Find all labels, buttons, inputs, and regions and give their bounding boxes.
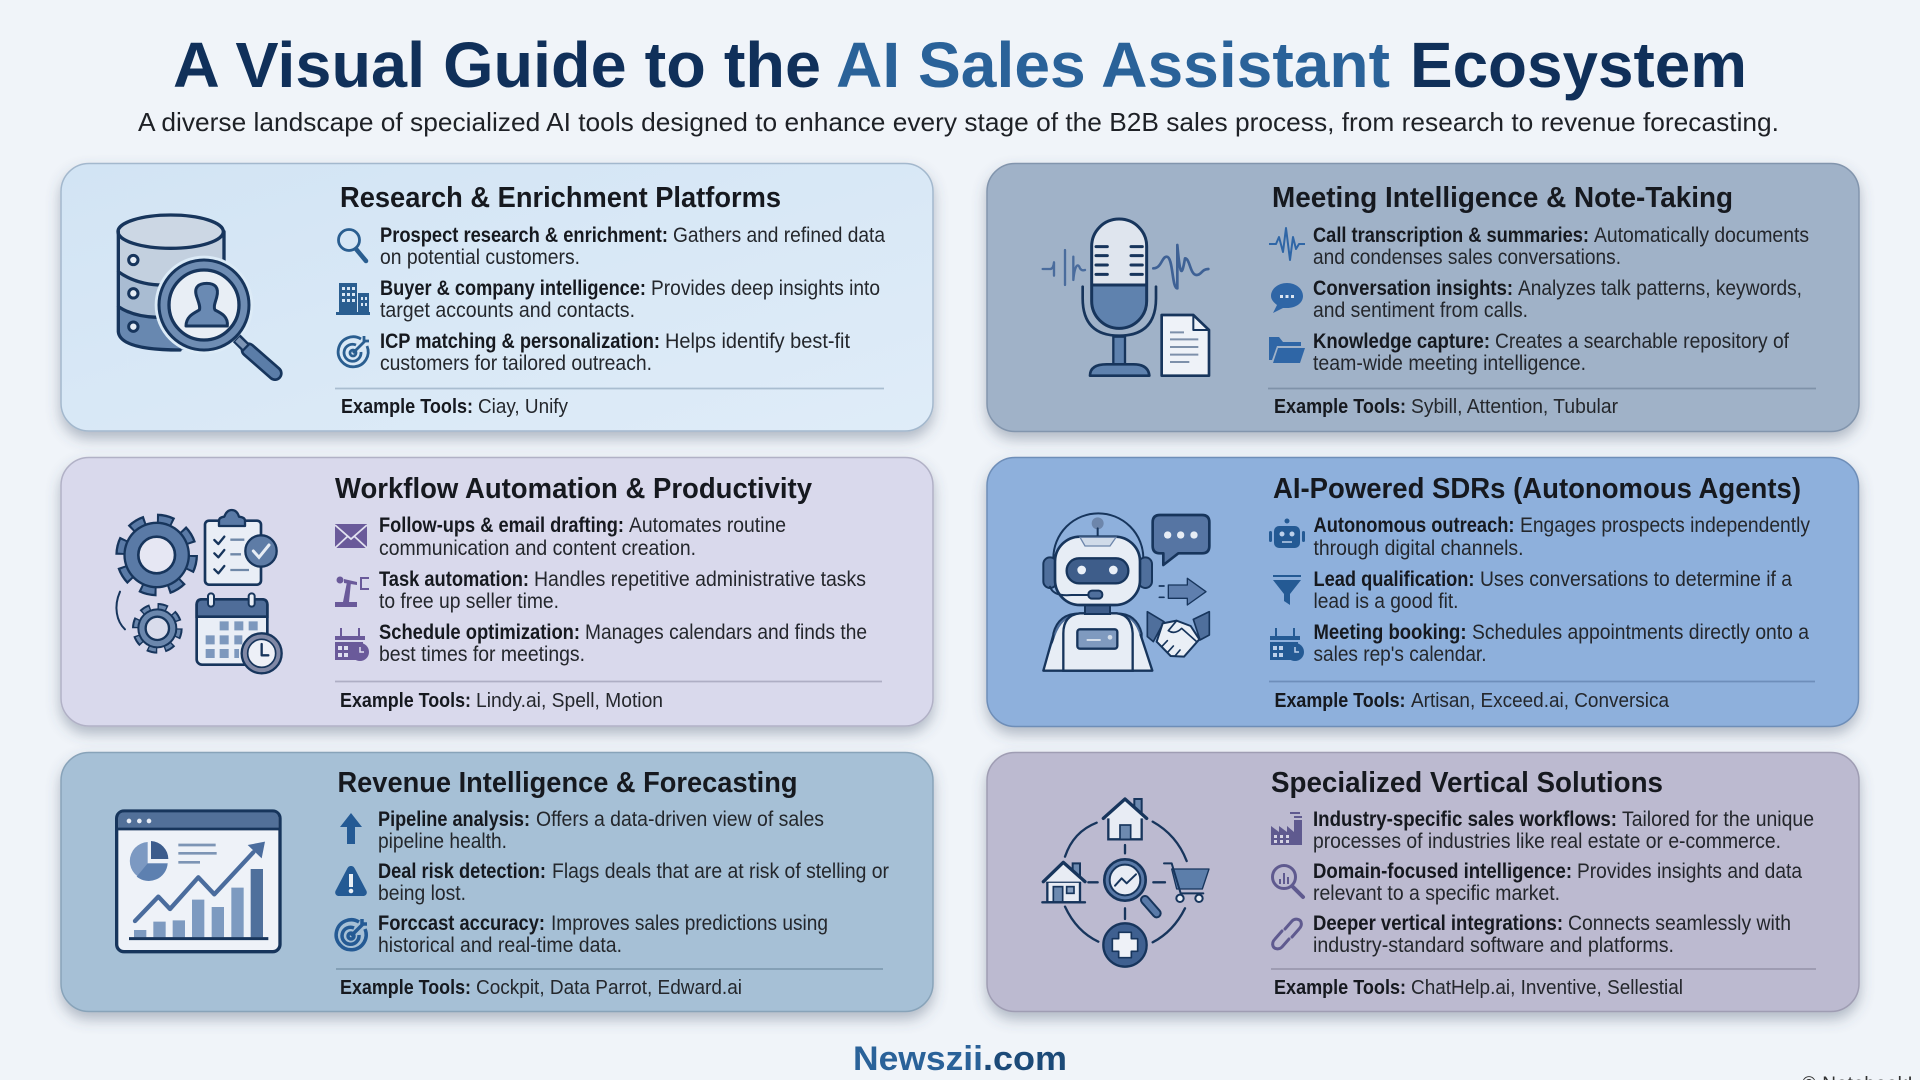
example tools: Example Tools: xyxy=(340,977,471,999)
bullet: meeting booking: sales rep's calendar. xyxy=(1314,643,1486,666)
bullet: buyer intelligence: target accounts and contacts. xyxy=(380,299,635,322)
heading: Specialized Vertical Solutions xyxy=(1271,767,1663,799)
bullet: conversation insights: Conversation insights: xyxy=(1313,277,1513,300)
icon: factory xyxy=(1271,813,1302,845)
bullet: ICP matching: Helps identify best-fit xyxy=(665,330,850,353)
title: Ecosystem xyxy=(1410,29,1747,101)
bullet: conversation insights: Analyzes talk patterns, keywords, xyxy=(1518,277,1802,300)
bullet: follow-ups: communication and content creation. xyxy=(379,537,696,560)
bullet: schedule optimization xyxy=(335,621,867,666)
bullet: knowledge capture: team-wide meeting intelligence. xyxy=(1313,352,1586,375)
bullet: ICP matching: ICP matching & personalization: xyxy=(380,330,660,353)
bullet: meeting booking: Schedules appointments directly onto a xyxy=(1472,621,1809,644)
panel: AI-Powered SDRs xyxy=(987,458,1858,726)
icon: gears, checklist and calendar xyxy=(116,510,282,673)
heading: Meeting Intelligence & Note-Taking xyxy=(1272,182,1733,214)
bullet: task automation: to free up seller time. xyxy=(379,590,559,613)
bullet: knowledge capture xyxy=(1269,330,1789,375)
bullet: prospect research: Gathers and refined data xyxy=(673,224,885,247)
bullet: lead qualification: Lead qualification: xyxy=(1314,568,1474,591)
bullet: lead qualification: lead is a good fit. xyxy=(1314,590,1458,613)
bullet: autonomous outreach: Autonomous outreach: xyxy=(1314,514,1514,537)
heading: AI-Powered SDRs (Autonomous Agents) xyxy=(1273,473,1801,505)
bullet: deal risk: being lost. xyxy=(378,882,466,905)
footer brand: Newszii xyxy=(853,1040,983,1078)
icon: robot with speech bubble and handshake xyxy=(1043,513,1209,671)
bullet: call transcription: Automatically documents xyxy=(1594,224,1809,247)
bullet: prospect research: Prospect research & enrichment: xyxy=(380,224,668,247)
icon: folder xyxy=(1269,337,1305,363)
icon: warning triangle xyxy=(335,866,367,896)
bullet: call transcription: Call transcription & summaries: xyxy=(1313,224,1589,247)
bullet: conversation insights xyxy=(1271,277,1802,322)
bullet: forecast accuracy: Improves sales predictions using xyxy=(551,912,828,935)
icon: calendar with clock xyxy=(335,628,369,661)
bullet: lead qualification xyxy=(1273,568,1792,613)
heading: Workflow Automation & Productivity xyxy=(335,473,812,505)
bullet: knowledge capture: Knowledge capture: xyxy=(1313,330,1490,353)
bullet: conversation insights: and sentiment from calls. xyxy=(1313,299,1528,322)
bullet: domain intelligence: Domain-focused intelligence: xyxy=(1313,860,1572,883)
bullet: ICP matching: customers for tailored outreach. xyxy=(380,352,652,375)
bullet: task automation: Task automation: xyxy=(379,568,529,591)
bullet: meeting booking xyxy=(1270,621,1809,666)
panel: Revenue Intelligence & Forecasting xyxy=(61,752,933,1012)
example tools: Example Tools: xyxy=(1274,396,1406,418)
icon: chain link xyxy=(1273,919,1301,949)
icon: industry hub xyxy=(1042,799,1209,967)
bullet: vertical integrations: Deeper vertical integrations: xyxy=(1313,912,1563,935)
subtitle: A diverse landscape of specialized AI tools designed to enhance every stage of the B2B sales process, from research to revenue forecasting. xyxy=(138,107,1779,137)
bullet: forecast accuracy: Forccast accuracy: xyxy=(378,912,545,935)
icon: envelope xyxy=(335,524,367,548)
icon: chat bubble xyxy=(1271,283,1303,313)
icon: target xyxy=(338,336,369,367)
bullet: domain intelligence xyxy=(1272,860,1802,905)
heading: Revenue Intelligence & Forecasting xyxy=(338,767,798,799)
icon: up arrow xyxy=(340,813,362,844)
bullet: industry workflows: Industry-specific sales workflows: xyxy=(1313,808,1617,831)
bullet: prospect research: on potential customers. xyxy=(380,246,580,269)
icon: robot arm xyxy=(335,576,369,607)
example tools: Example Tools: xyxy=(1274,690,1406,712)
panel: Workflow Automation & Productivity xyxy=(61,458,933,726)
bullet: call transcription xyxy=(1269,224,1809,269)
bullet: task automation xyxy=(335,568,866,613)
bullet: buyer intelligence: Buyer & company intelligence: xyxy=(380,277,646,300)
bullet: pipeline analysis: Offers a data-driven view of sales xyxy=(536,808,824,831)
example tools: Cockpit, Data Parrot, Edward.ai xyxy=(476,977,742,999)
bullet: vertical integrations xyxy=(1273,912,1791,957)
bullet: industry workflows: Tailored for the unique xyxy=(1622,808,1814,831)
title: A Visual Guide to the xyxy=(173,29,821,101)
bullet: domain intelligence: Provides insights and data xyxy=(1577,860,1802,883)
bullet: follow-ups: Automates routine xyxy=(629,514,786,537)
example tools: Artisan, Exceed.ai, Conversica xyxy=(1411,690,1670,712)
example tools: Example Tools: xyxy=(341,396,473,418)
bullet: buyer intelligence xyxy=(336,277,880,322)
bullet: vertical integrations: Connects seamlessly with xyxy=(1568,912,1791,935)
panel: Meeting Intelligence & Note-Taking xyxy=(987,164,1859,432)
icon: office building xyxy=(336,283,370,315)
bullet: pipeline analysis: Pipeline analysis: xyxy=(378,808,530,831)
icon: robot head xyxy=(1269,518,1305,548)
bullet: ICP matching xyxy=(338,330,850,375)
bullet: follow-ups: Follow-ups & email drafting: xyxy=(379,514,624,537)
bullet: pipeline analysis: pipeline health. xyxy=(378,830,507,853)
icon: magnifier with bars xyxy=(1272,866,1303,897)
icon: database with magnifier xyxy=(118,215,275,373)
bullet: meeting booking: Meeting booking: xyxy=(1314,621,1466,644)
panel: Specialized Vertical Solutions xyxy=(987,752,1859,1012)
bullet: forecast accuracy xyxy=(336,912,828,957)
bullet: industry workflows xyxy=(1271,808,1814,853)
example tools: Example Tools: xyxy=(1274,977,1406,999)
bullet: deal risk: Flags deals that are at risk of stelling or xyxy=(552,860,889,883)
bullet: industry workflows: processes of industries like real estate or e-commerce. xyxy=(1313,830,1781,853)
icon: waveform xyxy=(1269,228,1305,260)
icon: funnel xyxy=(1273,575,1301,605)
example tools: Example Tools: xyxy=(340,690,471,712)
bullet: deal risk: Deal risk detection: xyxy=(378,860,546,883)
bullet: task automation: Handles repetitive administrative tasks xyxy=(534,568,866,591)
panel: Research & Enrichment Platforms xyxy=(61,164,933,431)
icon: microphone and document xyxy=(1043,219,1209,376)
bullet: follow-ups xyxy=(335,514,786,560)
example tools: Ciay, Unify xyxy=(478,396,568,418)
title: AI Sales Assistant xyxy=(836,29,1390,101)
bullet: forecast accuracy: historical and real-time data. xyxy=(378,934,622,957)
bullet: deal risk xyxy=(335,860,889,905)
bullet: schedule optimization: Manages calendars and finds the xyxy=(585,621,867,644)
bullet: buyer intelligence: Provides deep insights into xyxy=(651,277,880,300)
icon: magnifying glass xyxy=(338,230,366,261)
bullet: autonomous outreach: Engages prospects independently xyxy=(1520,514,1810,537)
example tools: Sybill, Attention, Tubular xyxy=(1411,396,1618,418)
example tools: ChatHelp.ai, Inventive, Sellestial xyxy=(1411,977,1683,999)
bullet: lead qualification: Uses conversations to determine if a xyxy=(1480,568,1792,591)
bullet: prospect research xyxy=(338,224,885,269)
bullet: autonomous outreach: through digital channels. xyxy=(1314,537,1524,560)
icon: calendar with clock xyxy=(1270,628,1304,661)
heading: Research & Enrichment Platforms xyxy=(340,182,781,214)
bullet: domain intelligence: relevant to a specific market. xyxy=(1313,882,1560,905)
bullet: knowledge capture: Creates a searchable repository of xyxy=(1495,330,1789,353)
icon: target xyxy=(336,919,367,950)
bullet: autonomous outreach xyxy=(1269,514,1810,560)
bullet: pipeline analysis xyxy=(340,808,824,853)
footer brand: .com xyxy=(983,1040,1067,1078)
bullet: schedule optimization: best times for meetings. xyxy=(379,643,585,666)
bullet: call transcription: and condenses sales conversations. xyxy=(1313,246,1621,269)
bullet: vertical integrations: industry-standard software and platforms. xyxy=(1313,934,1674,957)
bullet: schedule optimization: Schedule optimization: xyxy=(379,621,580,644)
icon: analytics dashboard xyxy=(117,811,280,952)
example tools: Lindy.ai, Spell, Motion xyxy=(476,690,663,712)
